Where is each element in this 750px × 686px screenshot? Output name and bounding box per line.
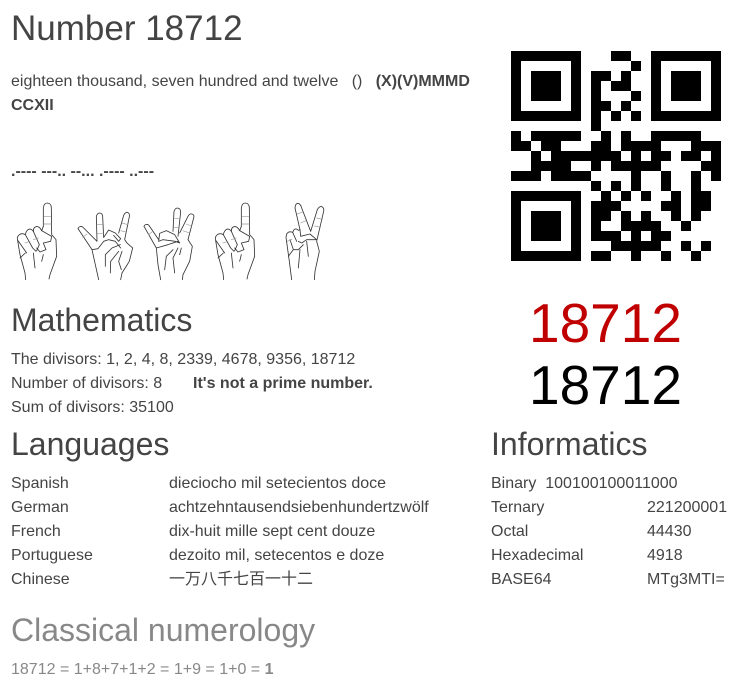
table: languages: dieciocho mil setecientos doce	[169, 475, 386, 492]
table: languages: Portuguese	[11, 547, 93, 564]
table: informatics	[491, 475, 727, 588]
table: informatics: MTg3MTI=	[647, 571, 725, 588]
text block: mathematics facts: Number of divisors: 8	[11, 375, 162, 392]
text block: number in words and roman numeral	[11, 73, 470, 114]
text block: mathematics facts: The divisors: 1, 2, 4, 8, 2339, 4678, 9356, 18712	[11, 351, 355, 368]
big number: red: 18712	[529, 292, 682, 354]
heading: Mathematics: Mathematics	[11, 302, 192, 338]
title: Number 18712	[11, 9, 243, 48]
text block: number in words and roman numeral: eighteen thousand, seven hundred and twelve () (X)(V)MMMD	[11, 73, 470, 90]
table: informatics: 221200001	[647, 499, 727, 516]
table: languages: French	[11, 523, 61, 540]
table: languages: 一万八千七百一十二	[169, 571, 313, 588]
hand: digit 8	[78, 212, 133, 280]
table: informatics: 44430	[647, 523, 692, 540]
table: languages: dezoito mil, setecentos e doze	[169, 547, 384, 564]
text block: mathematics facts: Sum of divisors: 35100	[11, 399, 174, 416]
table: informatics: Ternary	[491, 499, 544, 516]
sign language hands	[16, 202, 324, 280]
table: informatics: Hexadecimal	[491, 547, 583, 564]
hand: digit 1	[17, 203, 57, 280]
hand: digit 2	[286, 203, 324, 280]
QR code	[511, 51, 721, 261]
table: informatics: Octal	[491, 523, 528, 540]
hand: digit 1	[215, 203, 255, 280]
table: languages: German	[11, 499, 69, 516]
table: languages: Chinese	[11, 571, 70, 588]
table: informatics: 4918	[647, 547, 683, 564]
big number: black: 18712	[529, 354, 682, 416]
table: informatics: BASE64	[491, 571, 551, 588]
table: languages: dix-huit mille sept cent douze	[169, 523, 375, 540]
table: languages	[11, 475, 429, 588]
table: languages: achtzehntausendsiebenhundertzwölf	[169, 499, 429, 516]
morse code: .---- ---.. --... .---- ..---	[11, 163, 154, 180]
text block: numerology sum: 18712 = 1+8+7+1+2 = 1+9 = 1+0 = 1	[11, 661, 273, 678]
hand: digit 7	[144, 208, 194, 280]
table: informatics: Binary 100100100011000	[491, 475, 678, 492]
heading: Languages: Languages	[11, 426, 169, 462]
table: languages: Spanish	[11, 475, 69, 492]
text block: number in words and roman numeral: CCXII	[11, 97, 54, 114]
text block: mathematics facts: It's not a prime number.	[193, 375, 373, 392]
heading: Classical numerology: Classical numerology	[11, 612, 315, 648]
heading: Informatics: Informatics	[491, 426, 647, 462]
text block: mathematics facts	[11, 351, 373, 416]
